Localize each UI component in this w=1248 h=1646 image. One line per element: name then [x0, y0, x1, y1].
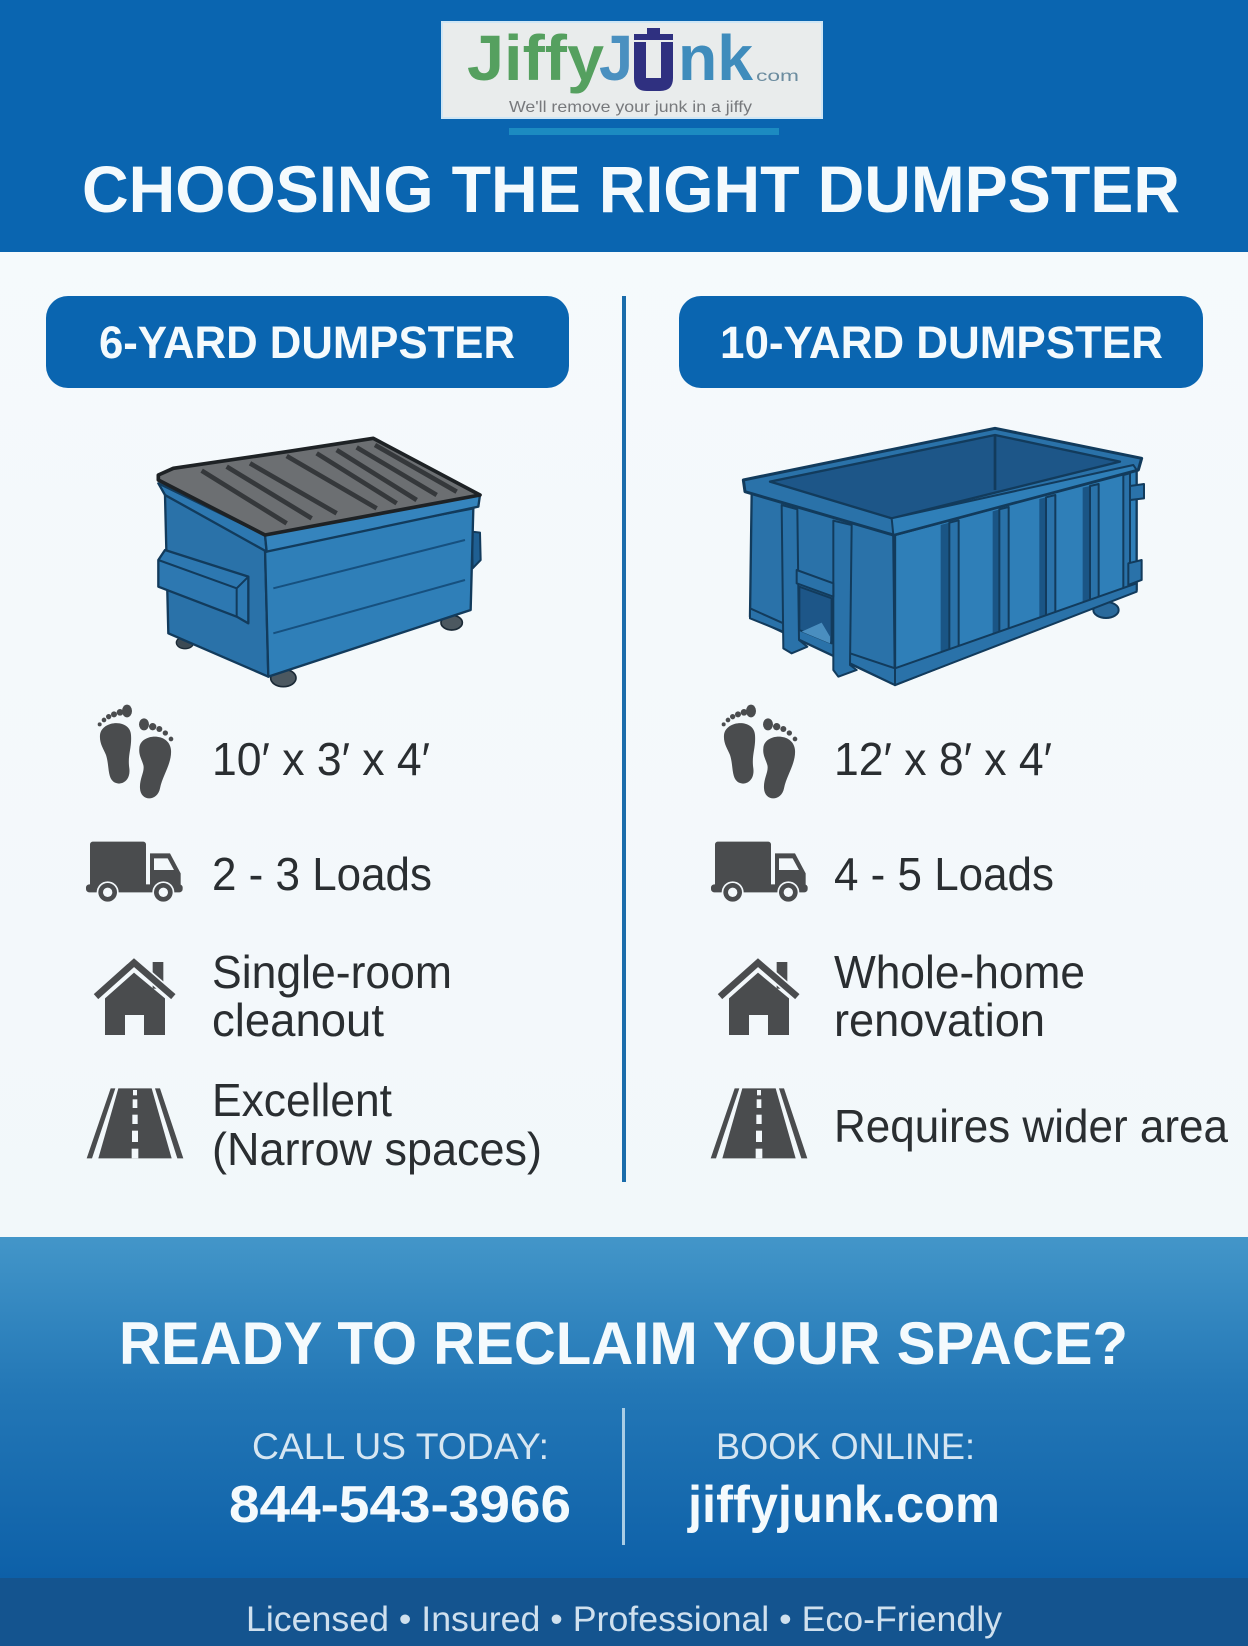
logo: nk — [678, 22, 753, 94]
dimensions text: 10′ x 3′ x 4′ — [212, 733, 430, 785]
panel: call to action footer — [0, 1237, 1248, 1578]
best use text line 2: cleanout — [212, 994, 384, 1046]
best use text line 2: renovation — [834, 994, 1045, 1046]
icon: road — [87, 1088, 183, 1158]
footer strip: Licensed • Insured • Professional • Eco-Friendly — [246, 1600, 1003, 1639]
icon: truck — [86, 842, 183, 903]
spec list: 10-yard — [711, 705, 1228, 1158]
call us label: CALL US TODAY: — [252, 1426, 549, 1467]
illustration: 6-yard front-load dumpster — [158, 438, 481, 687]
spec list: 6-yard — [86, 705, 542, 1175]
footer strip — [0, 1578, 1248, 1646]
logo: J — [599, 22, 633, 94]
logo — [442, 22, 822, 118]
access text: Requires wider area — [834, 1100, 1228, 1152]
panel: 6-yard heading pill: 6-YARD DUMPSTER — [99, 317, 515, 368]
dimensions text: 12′ x 8′ x 4′ — [834, 733, 1052, 785]
loads text: 2 - 3 Loads — [212, 848, 432, 900]
website: jiffyjunk.com — [687, 1476, 1000, 1534]
best use text: Whole-home — [834, 946, 1085, 998]
icon: house — [96, 962, 173, 1035]
icon: truck — [711, 842, 808, 903]
header band — [0, 0, 1248, 252]
loads text: 4 - 5 Loads — [834, 848, 1054, 900]
icon: footprints — [98, 705, 173, 798]
panel: 10-yard heading pill — [679, 296, 1203, 388]
icon: road — [711, 1088, 807, 1158]
access text line 2: (Narrow spaces) — [212, 1123, 542, 1175]
illustration: 10-yard roll-off dumpster — [743, 428, 1144, 685]
panel: 6-yard heading pill — [46, 296, 569, 388]
best use text: Single-room — [212, 946, 452, 998]
icon: footprints — [722, 705, 797, 798]
logo: We'll remove your junk in a jiffy — [509, 99, 752, 116]
title: CHOOSING THE RIGHT DUMPSTER — [82, 152, 1180, 226]
logo: com — [756, 68, 799, 85]
access text: Excellent — [212, 1074, 392, 1126]
panel: 10-yard heading pill: 10-YARD DUMPSTER — [720, 317, 1163, 368]
phone number: 844-543-3966 — [229, 1476, 571, 1534]
CTA heading: READY TO RECLAIM YOUR SPACE? — [119, 1310, 1128, 1377]
logo: Jiffy — [467, 22, 604, 94]
icon: house — [720, 962, 797, 1035]
book online label: BOOK ONLINE: — [716, 1426, 975, 1467]
